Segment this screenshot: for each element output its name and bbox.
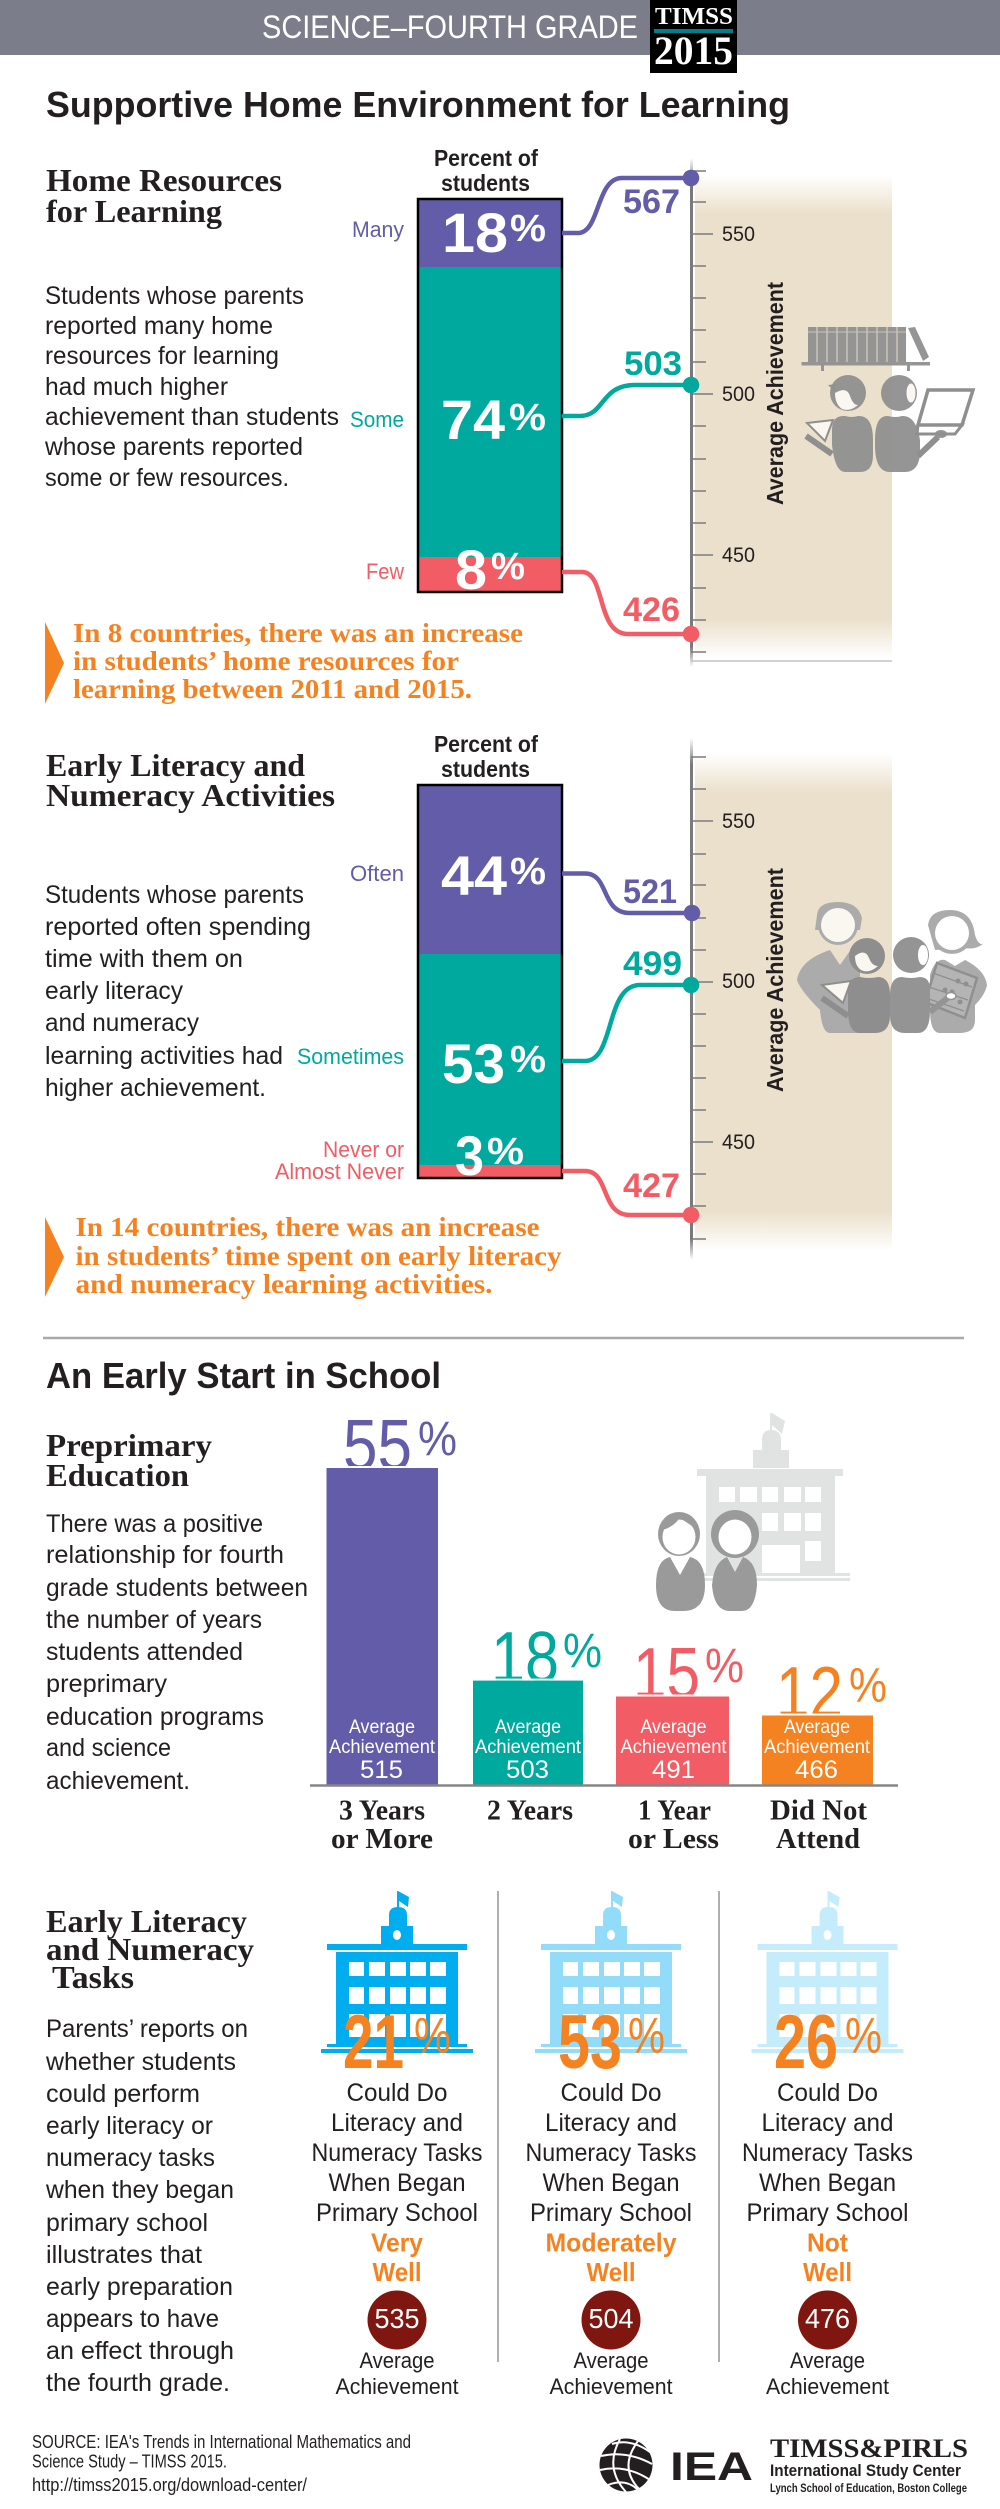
bar category labels: Did Not: [770, 1796, 868, 1826]
column: very well: Very: [371, 2228, 424, 2258]
column: very well: 21: [343, 2000, 404, 2085]
column: not well: Numeracy Tasks: [742, 2139, 913, 2167]
bar: 3 years or more: [326, 1406, 457, 1785]
connector: some 503: 503: [624, 345, 682, 383]
text block: preprimary description: and science: [46, 1734, 171, 1762]
achievement scale: early literacy activities: [690, 738, 892, 1260]
column: very well: Literacy and: [331, 2109, 463, 2137]
column: moderately well: Well: [586, 2257, 636, 2287]
connector: few 426: [562, 572, 699, 642]
heading: home resources for learning: [46, 162, 282, 229]
text block: early literacy activities description: higher achievement.: [45, 1074, 266, 1102]
stacked bar: home resources: 8: [455, 538, 487, 601]
connector: never 427: 427: [623, 1167, 680, 1205]
text block: early literacy tasks description: illustrates that: [46, 2241, 202, 2269]
connector: few 426: 426: [623, 591, 680, 629]
TIMSS and PIRLS logo: [770, 2434, 968, 2495]
source note: SOURCE: IEA's Trends in International Mathematics and: [32, 2432, 411, 2452]
text block: early literacy tasks description: primary school: [46, 2209, 208, 2237]
stacked bar: home resources: 74: [441, 388, 505, 451]
bar: 2 years: 503: [506, 1756, 549, 1784]
achievement score circle: 535: [368, 2290, 426, 2350]
text block: early literacy tasks description: could perform: [46, 2080, 200, 2108]
icon: school building dark blue: [321, 1891, 473, 2053]
connector: sometimes 499: [562, 945, 699, 1061]
icon: two students with bookshelf, book and laptop: [802, 327, 973, 472]
source note: Science Study – TIMSS 2015.: [32, 2452, 227, 2472]
source note: [32, 2432, 411, 2495]
text block: home resources description: Students whose parents: [45, 282, 304, 310]
text block: preprimary description: grade students between: [46, 1574, 308, 1602]
text block: home resources description: achievement than students: [45, 403, 339, 431]
icon: students in front of school: [656, 1413, 850, 1611]
bar: 2 years: Average: [495, 1717, 561, 1738]
column: very well: [312, 1891, 482, 2399]
callout: 8 countries: learning between 2011 and 2015.: [73, 674, 472, 704]
heading: early literacy and numeracy tasks: and Numeracy: [46, 1931, 254, 1967]
TIMSS 2015 logo: [650, 0, 737, 73]
icon: parents with children, book and abacus: [797, 902, 987, 1033]
bar chart: preprimary education: [310, 1406, 898, 1855]
achievement scale: early literacy activities: 550: [722, 810, 755, 833]
heading: early literacy and numeracy activities: [46, 747, 335, 813]
column: moderately well: Achievement: [550, 2374, 672, 2399]
stacked bar: home resources: %: [510, 208, 546, 250]
heading: preprimary education: [46, 1427, 212, 1493]
bar: 1 year or less: %: [705, 1640, 744, 1693]
bar: 2 years: %: [563, 1625, 602, 1678]
TIMSS 2015 logo: TIMSS: [655, 4, 733, 30]
text block: home resources description: some or few resources.: [45, 464, 289, 492]
achievement score circle: 476: [798, 2290, 857, 2350]
achievement scale: home resources: [690, 158, 892, 667]
TIMSS and PIRLS logo: TIMSS&PIRLS: [770, 2434, 968, 2463]
callout: 14 countries: In 14 countries, there was an increase: [76, 1212, 540, 1242]
column: very well: Average: [360, 2348, 434, 2373]
icon: school building mid blue: [535, 1891, 687, 2053]
heading: early literacy and numeracy tasks: [46, 1903, 254, 1995]
text block: home resources description: [44, 282, 339, 492]
connector: often 521: 521: [623, 873, 677, 911]
text block: preprimary description: preprimary: [46, 1670, 167, 1698]
IEA logo: [600, 2438, 753, 2492]
bar: 3 years or more: Achievement: [329, 1737, 436, 1758]
text block: early literacy tasks description: the fourth grade.: [46, 2369, 230, 2397]
text block: preprimary description: the number of years: [46, 1606, 262, 1634]
stacked bar: early literacy activities: students: [441, 756, 530, 782]
bar: 2 years: Achievement: [475, 1737, 582, 1758]
heading: early literacy and numeracy tasks: Tasks: [52, 1959, 134, 1995]
heading: early literacy and numeracy activities: Early Literacy and: [46, 747, 305, 783]
column: not well: Literacy and: [762, 2109, 894, 2137]
text block: early literacy activities description: early literacy: [45, 977, 183, 1005]
connector: many 567: 567: [623, 183, 680, 221]
category labels: home resources: Many: [352, 217, 404, 242]
bar: 1 year or less: Achievement: [620, 1737, 727, 1758]
bar: 1 year or less: 491: [652, 1756, 695, 1784]
column: moderately well: Numeracy Tasks: [526, 2139, 696, 2167]
bar: did not attend: 466: [795, 1756, 838, 1784]
achievement scale: home resources: 550: [722, 223, 755, 246]
column: moderately well: Average: [574, 2348, 648, 2373]
header title: SCIENCE–FOURTH GRADE: [262, 9, 638, 45]
text block: preprimary description: [46, 1510, 308, 1795]
icon: globe: [600, 2438, 652, 2492]
stacked bar: early literacy activities: Percent of: [434, 731, 538, 757]
bar category labels: Attend: [776, 1824, 860, 1855]
bar: 3 years or more: 515: [360, 1756, 403, 1784]
column: very well: Well: [372, 2257, 422, 2287]
text block: early literacy activities description: [45, 881, 311, 1102]
text block: early literacy activities description: Students whose parents: [45, 881, 304, 909]
text block: home resources description: reported many home: [45, 312, 273, 340]
text block: preprimary description: There was a positive: [46, 1510, 263, 1538]
column: not well: Primary School: [746, 2199, 908, 2227]
column: not well: When Began: [759, 2169, 896, 2197]
text block: preprimary description: achievement.: [46, 1767, 190, 1795]
text block: early literacy tasks description: Parents’ reports on: [46, 2015, 248, 2043]
bar: 1 year or less: 15: [633, 1634, 700, 1714]
column: not well: [742, 1891, 913, 2399]
bar: did not attend: 12: [776, 1653, 843, 1733]
category labels: early literacy activities: Almost Never: [275, 1159, 404, 1184]
bar category labels: or More: [331, 1824, 433, 1855]
achievement scale: home resources: 450: [722, 544, 755, 567]
text block: preprimary description: education programs: [46, 1703, 264, 1731]
column: not well: Could Do: [777, 2079, 878, 2107]
stacked bar: early literacy activities: %: [510, 1039, 546, 1081]
column: moderately well: Primary School: [530, 2199, 692, 2227]
bar: 1 year or less: Average: [640, 1717, 706, 1738]
column: not well: 26: [774, 2000, 838, 2085]
bar: did not attend: Achievement: [764, 1737, 871, 1758]
stacked bar: home resources: Percent of: [434, 145, 538, 171]
column: moderately well: Could Do: [560, 2079, 662, 2107]
axis label: Average Achievement: [762, 868, 788, 1092]
bar: 3 years or more: 55: [343, 1406, 412, 1486]
bar: 3 years or more: %: [418, 1413, 457, 1466]
axis label: Average Achievement: [762, 282, 788, 505]
icon: school building light blue: [752, 1891, 904, 2053]
column: not well: Not: [807, 2228, 848, 2258]
callout: 8 countries: [45, 618, 523, 704]
text block: early literacy tasks description: when they began: [45, 2176, 234, 2204]
connector: many 567: [562, 170, 699, 233]
category labels: early literacy activities: Often: [350, 861, 404, 886]
TIMSS and PIRLS logo: International Study Center: [770, 2461, 961, 2480]
TIMSS 2015 logo: 2015: [654, 28, 733, 73]
category labels: home resources: [350, 217, 404, 584]
column: very well: Primary School: [316, 2199, 478, 2227]
text block: home resources description: had much higher: [45, 373, 228, 401]
bar: 2 years: [473, 1618, 602, 1785]
text block: early literacy activities description: time with them on: [45, 945, 243, 973]
stacked bar: early literacy activities: %: [510, 851, 546, 893]
stacked bar: early literacy activities: 3: [455, 1124, 484, 1187]
column: moderately well: Moderately: [546, 2228, 677, 2258]
heading: home resources for learning: for Learning: [46, 193, 222, 229]
connector: often 521: [562, 873, 700, 921]
heading: preprimary education: Education: [46, 1457, 189, 1493]
text block: early literacy activities description: reported often spending: [45, 913, 311, 941]
bar category labels: 2 Years: [487, 1796, 573, 1826]
category labels: early literacy activities: Never or: [323, 1137, 404, 1162]
bar: 1 year or less: [616, 1634, 744, 1785]
section title: supportive home environment: Supportive Home Environment for Learning: [46, 84, 790, 125]
category labels: home resources: Some: [350, 407, 404, 432]
achievement score circle: 535: 535: [374, 2303, 420, 2334]
achievement score circle: 504: [582, 2290, 640, 2350]
column: very well: %: [414, 2008, 451, 2064]
bar category labels: [331, 1796, 868, 1855]
column: not well: Achievement: [766, 2374, 889, 2399]
text block: preprimary description: relationship for fourth: [46, 1541, 284, 1569]
column: very well: Could Do: [346, 2079, 448, 2107]
stacked bar: early literacy activities: 53: [442, 1032, 505, 1095]
text block: early literacy tasks description: appears to have: [46, 2305, 219, 2333]
category labels: early literacy activities: Sometimes: [297, 1044, 404, 1069]
callout: 8 countries: In 8 countries, there was an increase: [73, 618, 523, 648]
stacked bar: home resources: %: [491, 546, 525, 588]
stacked bar: home resources: [418, 145, 562, 601]
callout: 14 countries: in students’ time spent on early literacy: [76, 1241, 562, 1271]
connector: never 427: [562, 1167, 699, 1223]
stacked bar: home resources: students: [441, 170, 530, 196]
column: moderately well: [526, 1891, 696, 2399]
section title: an early start in school: An Early Start in School: [46, 1355, 441, 1396]
bar: did not attend: [762, 1653, 887, 1785]
connector: sometimes 499: 499: [623, 945, 682, 983]
text block: early literacy tasks description: numeracy tasks: [46, 2144, 215, 2172]
callout: 8 countries: in students’ home resources for: [73, 646, 459, 676]
bar: did not attend: Average: [784, 1717, 850, 1738]
IEA logo: IEA: [670, 2445, 753, 2489]
text block: early literacy activities description: and numeracy: [45, 1009, 199, 1037]
bar category labels: 1 Year: [638, 1796, 711, 1826]
header banner: [0, 0, 1000, 73]
bar category labels: or Less: [628, 1824, 719, 1855]
stacked bar: early literacy activities: 44: [441, 844, 507, 907]
bar: 2 years: 18: [491, 1618, 559, 1698]
text block: early literacy activities description: learning activities had: [45, 1042, 283, 1070]
column: very well: Numeracy Tasks: [312, 2139, 482, 2167]
stacked bar: early literacy activities: [418, 731, 562, 1187]
bar: did not attend: %: [849, 1660, 887, 1712]
column: moderately well: %: [628, 2008, 665, 2064]
achievement score circle: 504: 504: [588, 2303, 634, 2334]
heading: early literacy and numeracy tasks: Early Literacy: [46, 1903, 247, 1939]
text block: early literacy tasks description: [45, 2015, 248, 2397]
column: moderately well: When Began: [542, 2169, 680, 2197]
achievement scale: early literacy activities: 450: [722, 1131, 755, 1154]
callout: 14 countries: [45, 1212, 562, 1299]
column: moderately well: Literacy and: [545, 2109, 677, 2137]
bar category labels: 3 Years: [339, 1796, 425, 1826]
column: very well: Achievement: [336, 2374, 458, 2399]
category labels: home resources: Few: [366, 559, 404, 584]
text block: early literacy tasks description: an effect through: [46, 2337, 234, 2365]
bar: 3 years or more: Average: [349, 1717, 415, 1738]
achievement score circle: 476: 476: [805, 2303, 850, 2334]
text block: home resources description: resources for learning: [45, 342, 279, 370]
source note: http://timss2015.org/download-center/: [32, 2475, 307, 2495]
text block: early literacy tasks description: whether students: [45, 2048, 236, 2076]
stacked bar: home resources: %: [509, 397, 546, 439]
stacked bar: home resources: 18: [442, 201, 508, 264]
stacked bar: early literacy activities: %: [487, 1131, 524, 1173]
achievement scale: home resources: 500: [722, 383, 755, 406]
category labels: early literacy activities: [275, 861, 404, 1184]
text block: early literacy tasks description: early preparation: [46, 2273, 233, 2301]
column: not well: %: [845, 2008, 882, 2064]
column: not well: Average: [790, 2348, 865, 2373]
column: moderately well: 53: [558, 2000, 622, 2085]
achievement scale: early literacy activities: 500: [722, 970, 755, 993]
heading: home resources for learning: Home Resources: [46, 162, 282, 198]
text block: home resources description: whose parents reported: [44, 433, 303, 461]
column: not well: Well: [803, 2257, 852, 2287]
heading: early literacy and numeracy activities: Numeracy Activities: [46, 777, 335, 813]
connector: some 503: [562, 345, 699, 416]
callout: 14 countries: and numeracy learning activities.: [76, 1269, 492, 1299]
heading: preprimary education: Preprimary: [46, 1427, 212, 1463]
column: very well: When Began: [328, 2169, 466, 2197]
text block: preprimary description: students attended: [46, 1638, 243, 1666]
text block: early literacy tasks description: early literacy or: [46, 2112, 213, 2140]
